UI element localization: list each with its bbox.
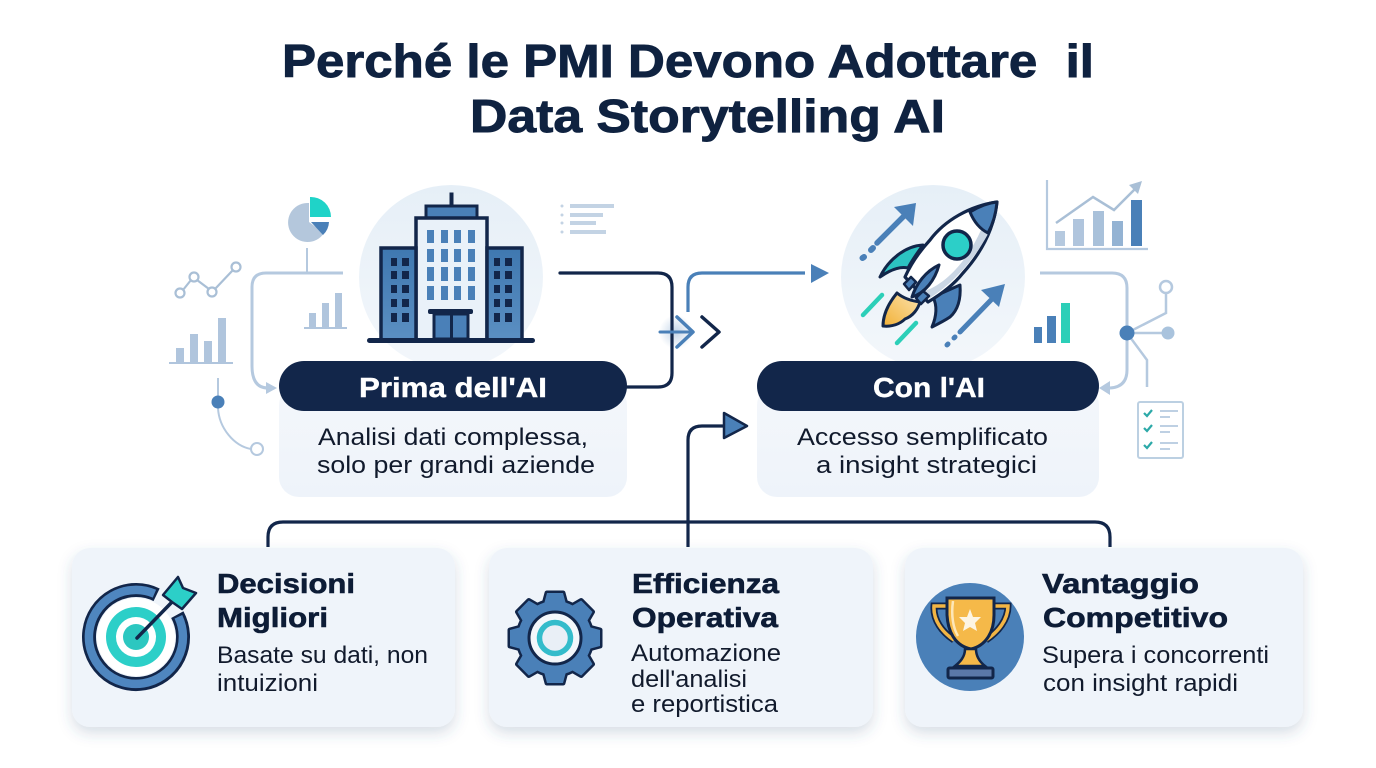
text: Decisioni Migliori: intuizioni xyxy=(217,670,318,697)
arrow: blue connector to rocket xyxy=(688,264,829,312)
text: Efficienza Operativa: e reportistica xyxy=(631,691,779,718)
text: Vantaggio Competitivo: Supera i concorrenti xyxy=(1042,642,1269,669)
text: Vantaggio Competitivo: Vantaggio xyxy=(1042,568,1199,599)
text: Prima dell'AI description: Analisi dati complessa, xyxy=(318,424,588,451)
text: Vantaggio Competitivo: Competitivo xyxy=(1043,602,1228,633)
text: Efficienza Operativa: Operativa xyxy=(632,602,778,633)
pill: Con l'AI heading xyxy=(757,361,1099,411)
text: Decisioni Migliori xyxy=(217,568,428,697)
decoration: node with curve xyxy=(212,378,263,455)
glow behind transition arrow xyxy=(659,315,693,349)
arrow: benefits to Con l'AI xyxy=(724,413,747,438)
text: Vantaggio Competitivo xyxy=(1042,568,1269,697)
decoration: growth chart xyxy=(1047,180,1148,249)
card: Vantaggio Competitivo xyxy=(905,548,1303,727)
connector: into Con l'AI with node branches xyxy=(1040,273,1174,395)
card: Efficienza Operativa xyxy=(489,548,873,727)
illustration: building xyxy=(359,185,543,369)
pill: Prima dell'AI heading xyxy=(279,361,627,411)
title xyxy=(282,35,1094,142)
text: Efficienza Operativa xyxy=(631,568,781,718)
text: Decisioni Migliori: Decisioni xyxy=(217,568,355,599)
text: Decisioni Migliori: Migliori xyxy=(217,602,328,633)
icon: target with arrow xyxy=(89,577,196,684)
text: Con l'AI description: a insight strategici xyxy=(816,452,1037,479)
text: Vantaggio Competitivo: con insight rapidi xyxy=(1043,670,1238,697)
text: Efficienza Operativa: dell'analisi xyxy=(631,666,747,693)
text: Con l'AI description xyxy=(797,424,1048,479)
text: Decisioni Migliori: Basate su dati, non xyxy=(217,642,428,669)
decoration: small bar chart xyxy=(304,293,347,329)
pill: Con l'AI heading: Con l'AI xyxy=(873,372,985,403)
text: Prima dell'AI description: solo per grandi aziende xyxy=(317,452,595,479)
decoration: line chart xyxy=(176,262,240,298)
title: Perché le PMI Devono Adottare il xyxy=(282,35,1094,87)
arrow: central transition chevrons xyxy=(660,317,719,347)
panel: Prima dell'AI xyxy=(279,361,627,497)
decoration: pie chart xyxy=(288,197,331,242)
text: Efficienza Operativa: Automazione xyxy=(631,640,781,667)
decoration: list icon xyxy=(560,204,614,234)
title: Data Storytelling AI xyxy=(470,90,945,142)
illustration: rocket with arrows xyxy=(841,185,1025,369)
pill: Prima dell'AI heading: Prima dell'AI xyxy=(359,372,547,403)
connector: top junction bar linking the three cards xyxy=(268,426,1110,547)
text: Efficienza Operativa: Efficienza xyxy=(632,568,779,599)
card: Decisioni Migliori xyxy=(72,548,455,727)
decoration: small colored bars xyxy=(1034,303,1070,343)
connector: into Prima dell'AI xyxy=(252,248,343,394)
decoration: bar chart left xyxy=(169,318,233,364)
text: Prima dell'AI description xyxy=(317,424,595,479)
icon: gear xyxy=(510,593,600,683)
panel: Con l'AI xyxy=(757,361,1099,497)
icon: trophy xyxy=(916,583,1024,691)
text: Con l'AI description: Accesso semplificato xyxy=(797,424,1048,451)
decoration: checklist xyxy=(1138,402,1183,458)
arrow: Prima dell'AI outgoing connector xyxy=(560,273,672,387)
